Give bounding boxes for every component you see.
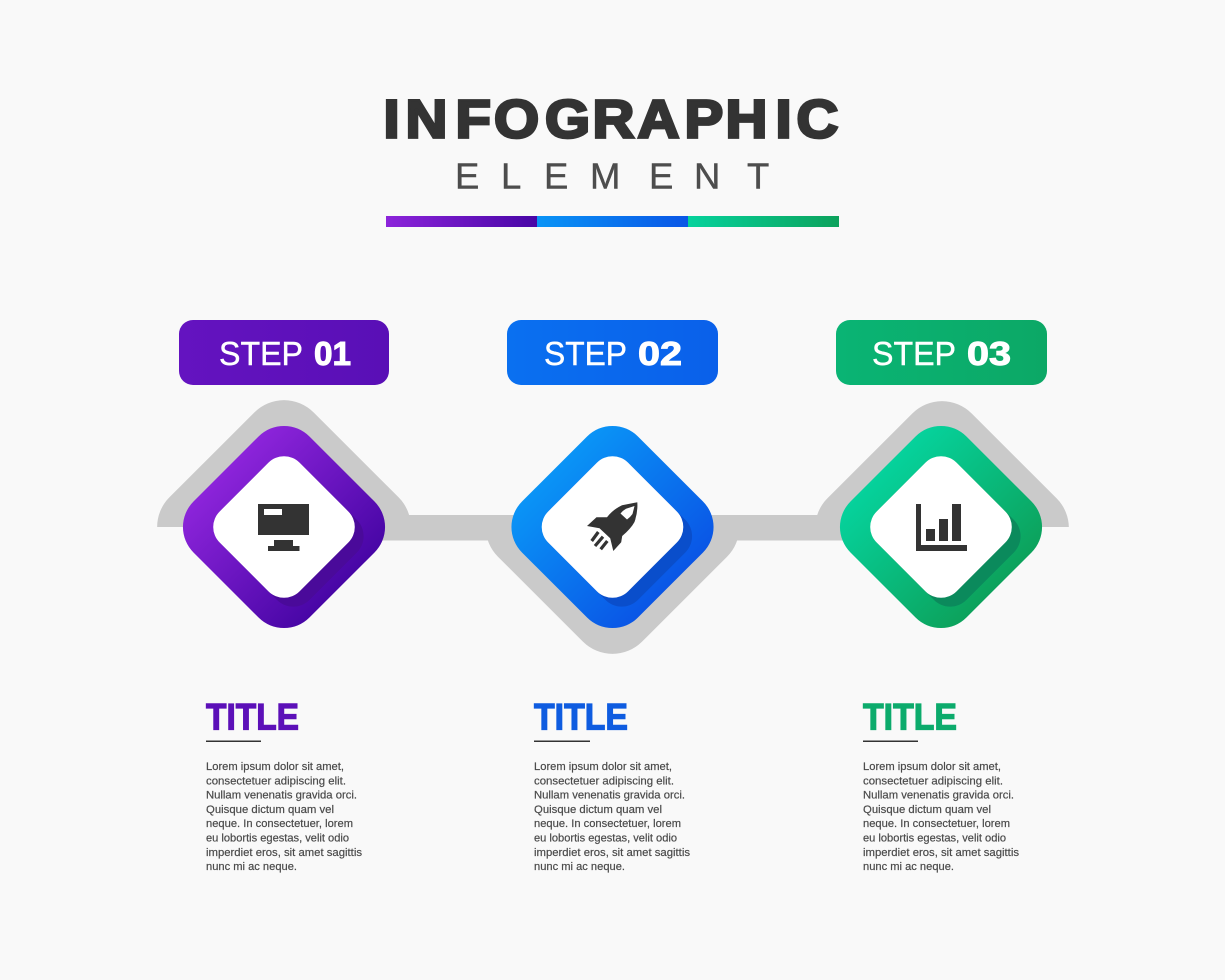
step 01 badge xyxy=(179,320,389,385)
panel: step 01 xyxy=(168,320,400,873)
grey connector track xyxy=(140,383,1086,672)
step 01 description: consectetuer adipiscing elit. xyxy=(206,775,346,787)
step 01 description: imperdiet eros, sit amet sagittis xyxy=(206,847,362,859)
step 03 badge xyxy=(836,320,1047,385)
step 03 badge: 03 xyxy=(967,335,1011,372)
step 02 description: Quisque dictum quam vel xyxy=(534,804,662,816)
step 03 text block xyxy=(863,696,1019,873)
step 02 description: nunc mi ac neque. xyxy=(534,861,625,873)
step 02 description: Lorem ipsum dolor sit amet, xyxy=(534,761,672,773)
step 01 badge: 01 xyxy=(314,335,351,372)
step 02 description xyxy=(534,761,690,873)
step 01 badge: STEP xyxy=(219,335,303,372)
step 03 description: consectetuer adipiscing elit. xyxy=(863,775,1003,787)
step 03 description: Lorem ipsum dolor sit amet, xyxy=(863,761,1001,773)
icon: bar chart xyxy=(916,504,967,551)
step 02 title: TITLE xyxy=(534,696,628,737)
panel: step 02 xyxy=(497,320,728,873)
step 02 diamond xyxy=(497,411,728,643)
step 03 title: TITLE xyxy=(863,696,957,737)
step 02 badge xyxy=(507,320,718,385)
step 01 description: Nullam venenatis gravida orci. xyxy=(206,790,357,802)
step 02 description: imperdiet eros, sit amet sagittis xyxy=(534,847,690,859)
icon: monitor xyxy=(258,504,309,551)
step 03 badge: STEP xyxy=(872,335,956,372)
step 02 description: neque. In consectetuer, lorem xyxy=(534,818,681,830)
icon: rocket xyxy=(587,502,637,551)
step 01 description: neque. In consectetuer, lorem xyxy=(206,818,353,830)
step 02 description: consectetuer adipiscing elit. xyxy=(534,775,674,787)
step 01 description xyxy=(206,761,362,873)
step 03 diamond xyxy=(825,411,1057,643)
step 03 description: neque. In consectetuer, lorem xyxy=(863,818,1010,830)
step 01 title: TITLE xyxy=(206,696,299,737)
step 02 description: Nullam venenatis gravida orci. xyxy=(534,790,685,802)
step 01 description: Lorem ipsum dolor sit amet, xyxy=(206,761,344,773)
step 02 description: eu lobortis egestas, velit odio xyxy=(534,832,677,844)
step 01 diamond xyxy=(168,411,400,643)
step 03 description: nunc mi ac neque. xyxy=(863,861,954,873)
step 02 badge: 02 xyxy=(638,335,682,372)
subheading: ELEMENT: ELEMENT xyxy=(455,156,769,196)
step 03 description xyxy=(863,761,1019,873)
step 01 description: eu lobortis egestas, velit odio xyxy=(206,832,349,844)
step 01 text block xyxy=(206,696,362,873)
step 01 description: nunc mi ac neque. xyxy=(206,861,297,873)
panel: step 03 xyxy=(825,320,1057,873)
step 03 description: imperdiet eros, sit amet sagittis xyxy=(863,847,1019,859)
step 03 description: Nullam venenatis gravida orci. xyxy=(863,790,1014,802)
step 02 badge: STEP xyxy=(544,335,627,372)
heading: INFOGRAPHIC: INFOGRAPHIC xyxy=(384,88,838,149)
step 01 description: Quisque dictum quam vel xyxy=(206,804,334,816)
step 03 description: Quisque dictum quam vel xyxy=(863,804,991,816)
title block xyxy=(384,88,839,227)
step 03 description: eu lobortis egestas, velit odio xyxy=(863,832,1006,844)
tricolour underline xyxy=(386,216,839,227)
step 02 text block xyxy=(534,696,690,873)
